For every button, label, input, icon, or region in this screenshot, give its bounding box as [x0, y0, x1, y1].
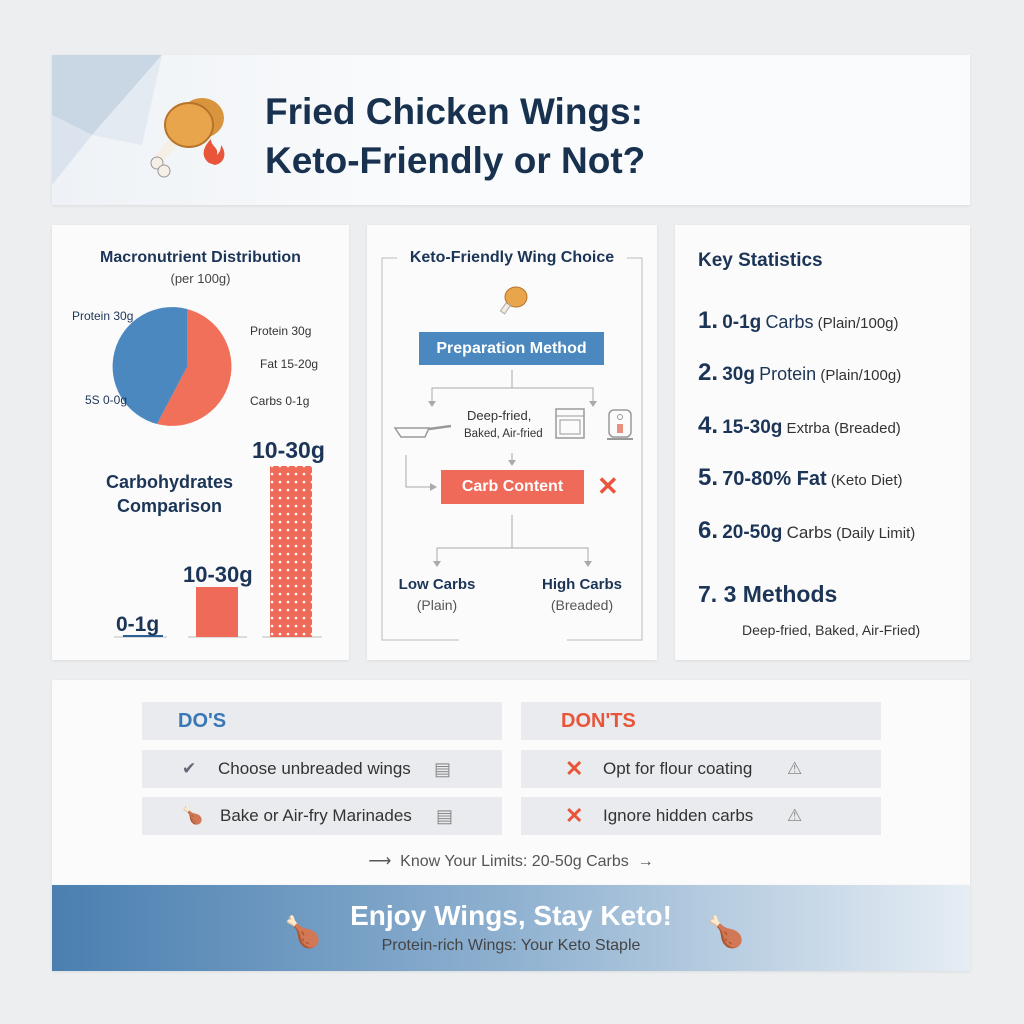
dont 1: ✕ — [565, 756, 583, 781]
text: high carbs: (Breaded) — [551, 597, 613, 613]
stat 6: 6. 20-50g Carbs (Daily Limit) — [698, 517, 915, 544]
bar chart: 0-1g — [116, 613, 159, 636]
panel: key statistics — [675, 225, 970, 660]
heading: carbohydrates comparison: Comparison — [117, 496, 222, 516]
banner title: Enjoy Wings, Stay Keto! — [350, 900, 672, 931]
text: high carbs — [542, 576, 622, 613]
dont 2: ⚠ — [787, 806, 802, 825]
panel: flowchart: Baked, Air-fried — [464, 428, 543, 440]
heading: carbohydrates comparison — [106, 472, 233, 516]
banner subtitle: Protein-rich Wings: Your Keto Staple — [382, 937, 640, 954]
dont 1: ⚠ — [787, 759, 802, 778]
heading: carbohydrates comparison: Carbohydrates — [106, 472, 233, 492]
dont 2 — [521, 797, 881, 835]
pie chart: Carbs 0-1g — [250, 394, 309, 408]
don'ts header — [521, 702, 881, 740]
icon: red x: ✕ — [597, 471, 619, 501]
stat 4: 4. 15-30g Extrba (Breaded) — [698, 412, 901, 439]
dont 1: Opt for flour coating — [603, 759, 752, 778]
text: low carbs: Low Carbs — [399, 576, 475, 593]
pie chart: 5S 0-0g — [85, 393, 127, 407]
stat 7: 7. 3 Methods — [698, 581, 837, 607]
box: preparation method: Preparation Method — [436, 340, 587, 357]
box: carb content: Carb Content — [462, 478, 563, 495]
do 2: 🍗 — [182, 806, 203, 825]
text: high carbs: High Carbs — [542, 576, 622, 593]
icon: drumstick right: 🍗 — [707, 916, 744, 949]
panel: do's and don'ts — [52, 680, 970, 885]
heading: Keto-Friendly Wing Choice — [410, 249, 614, 266]
do 2: ▤ — [436, 806, 453, 826]
icon: air fryer — [607, 409, 633, 440]
icon: chicken drumstick with flame — [150, 98, 224, 178]
panel: flowchart — [367, 225, 657, 660]
icon: drumstick — [500, 286, 528, 314]
stat 5: 5. 70-80% Fat (Keto Diet) — [698, 464, 903, 491]
dont 2: ✕ — [565, 803, 583, 828]
do's header — [142, 702, 502, 740]
panel: key statistics: Deep-fried, Baked, Air-Fried) — [742, 622, 920, 638]
heading: Macronutrient Distribution — [100, 249, 301, 266]
text: low carbs: (Plain) — [417, 597, 457, 613]
icon: frying pan — [394, 424, 452, 438]
pie chart — [72, 307, 318, 426]
title: Fried Chicken Wings: — [265, 91, 643, 132]
text: low carbs — [399, 576, 475, 613]
text: methods: Deep-fried, — [467, 408, 531, 423]
icon: oven — [555, 408, 585, 439]
box: preparation method — [419, 332, 604, 365]
footer banner — [52, 885, 970, 971]
bar chart: 10-30g — [252, 437, 325, 463]
header panel — [52, 55, 970, 205]
dont 1 — [521, 750, 881, 788]
title: Keto-Friendly or Not? — [265, 140, 645, 181]
stat 1: 1. 0-1g Carbs (Plain/100g) — [698, 307, 899, 334]
title — [265, 91, 645, 181]
pie chart: Protein 30g — [250, 324, 311, 338]
panel: macronutrients — [52, 225, 349, 660]
do 2: Bake or Air-fry Marinades — [220, 806, 412, 825]
panel: macronutrients: (per 100g) — [170, 271, 230, 286]
don'ts header: DON'TS — [561, 710, 636, 732]
do 2 — [142, 797, 502, 835]
icon: drumstick left: 🍗 — [284, 916, 321, 949]
box: carb content — [441, 470, 584, 504]
bar chart: 10-30g — [183, 562, 253, 587]
dont 2: Ignore hidden carbs — [603, 806, 753, 825]
bar chart — [114, 437, 325, 638]
pie chart: Protein 30g — [72, 309, 133, 323]
stat 2: 2. 30g Protein (Plain/100g) — [698, 359, 901, 386]
do's header: DO'S — [178, 710, 226, 732]
pie chart: Fat 15-20g — [260, 357, 318, 371]
heading: Key Statistics — [698, 250, 823, 271]
do 1 — [142, 750, 502, 788]
do 1: ✔ — [182, 759, 196, 778]
do 1: ▤ — [434, 759, 451, 779]
footer note: ⟶ Know Your Limits: 20-50g Carbs → — [368, 853, 654, 870]
do 1: Choose unbreaded wings — [218, 759, 411, 778]
decorative corner shapes — [52, 55, 162, 184]
